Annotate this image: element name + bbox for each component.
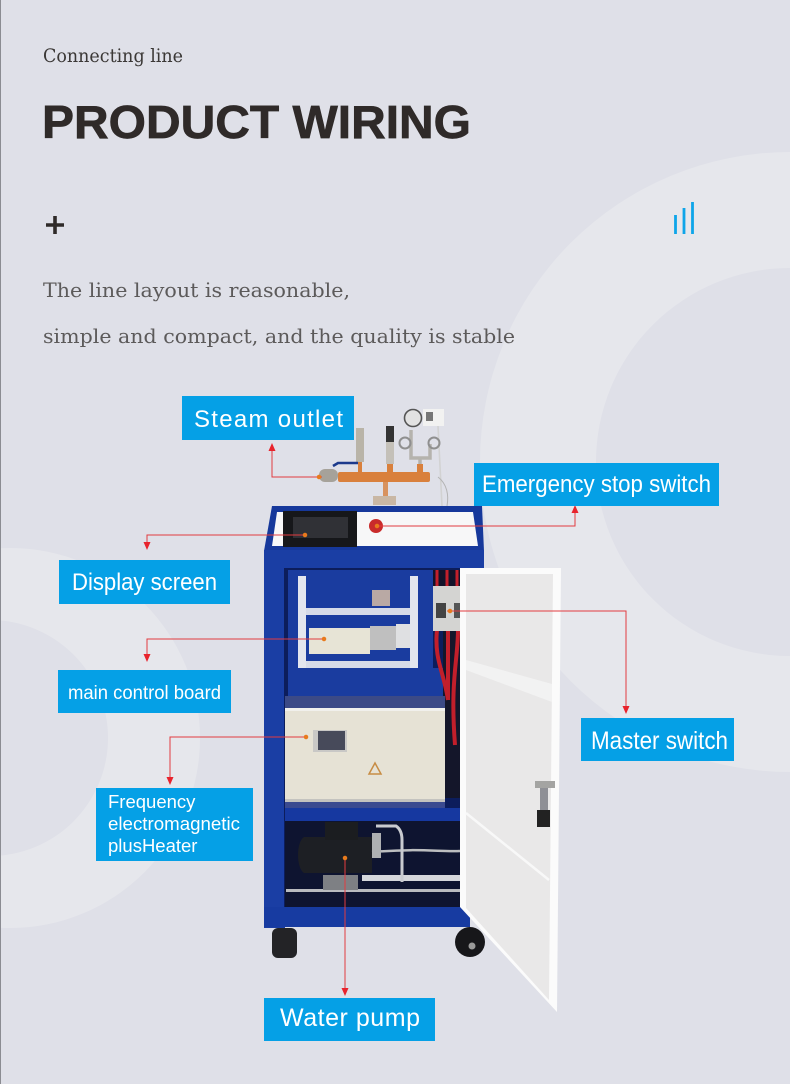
arrowheads and dots <box>144 443 630 996</box>
callout lines <box>147 447 626 992</box>
label: Master switch <box>581 718 734 761</box>
label: main control board: main control board <box>68 683 221 704</box>
eyebrow: Connecting line: Connecting line <box>43 46 183 67</box>
pump bay <box>285 821 460 907</box>
label: Water pump <box>264 998 435 1041</box>
subtitle text <box>43 279 515 348</box>
product: steam piping <box>319 409 448 506</box>
subtitle text: simple and compact, and the quality is stable <box>43 325 515 348</box>
inverter heater <box>285 696 445 808</box>
control panel <box>272 512 478 546</box>
label: Frequency electromagnetic plusHeater: Frequency <box>108 791 196 812</box>
title: PRODUCT WIRING <box>42 96 471 148</box>
label: Display screen <box>59 560 230 604</box>
icon: plus <box>46 216 64 234</box>
product: boiler cabinet <box>264 506 561 1012</box>
subtitle text: The line layout is reasonable, <box>43 279 350 302</box>
label: Emergency stop switch: Emergency stop switch <box>482 471 711 498</box>
label: Frequency electromagnetic plusHeater: plusHeater <box>108 835 197 856</box>
contactor and red cables <box>433 570 461 586</box>
caster right <box>455 927 485 957</box>
label: main control board <box>58 670 231 713</box>
label: Steam outlet: Steam outlet <box>194 406 343 433</box>
open door <box>460 568 561 1012</box>
caster left <box>272 928 297 958</box>
label: Frequency electromagnetic plusHeater <box>96 788 253 861</box>
label: Frequency electromagnetic plusHeater: electromagnetic <box>108 813 240 834</box>
label: Master switch: Master switch <box>591 727 728 755</box>
label: Display screen: Display screen <box>72 569 217 596</box>
label: Water pump: Water pump <box>280 1004 420 1032</box>
label: Steam outlet <box>182 396 354 440</box>
label: Emergency stop switch <box>474 463 719 506</box>
icon: blue bars <box>676 202 692 234</box>
electrical bay <box>288 570 433 696</box>
